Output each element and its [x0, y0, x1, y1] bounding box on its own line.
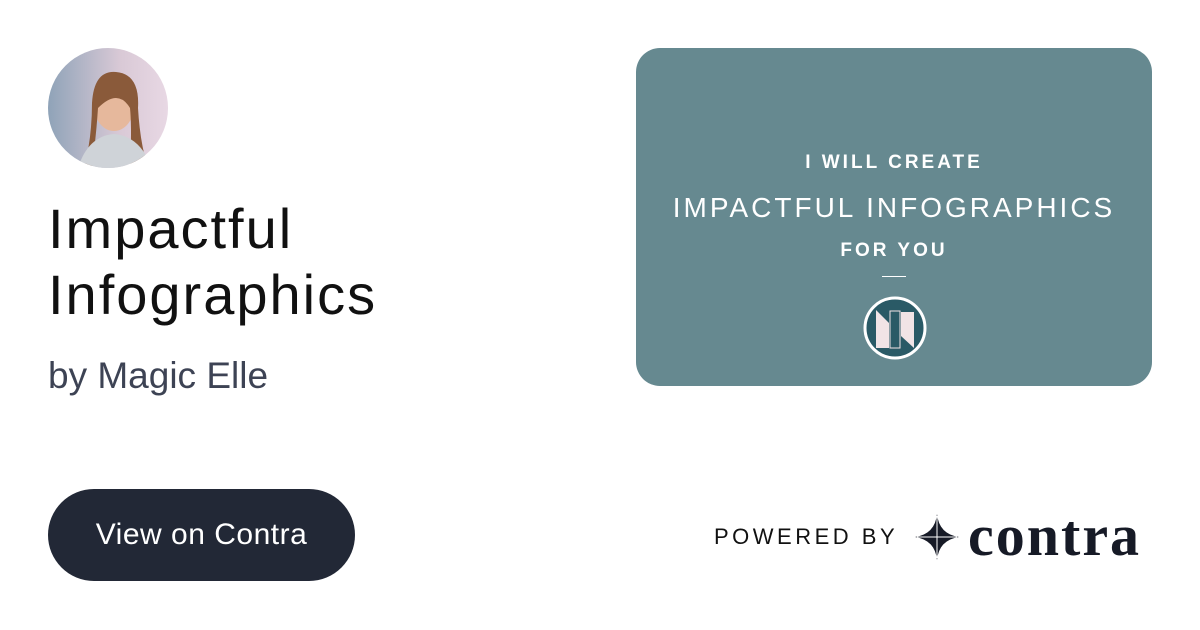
avatar: [48, 48, 168, 168]
title: Infographics: [48, 263, 377, 326]
button: View on Contra: [96, 518, 307, 551]
title: Impactful: [48, 197, 293, 260]
author: by Magic Elle: [48, 355, 268, 396]
card: FOR YOU: [840, 240, 948, 261]
icon: logo: [864, 296, 926, 360]
powered by: POWERED BY: [714, 524, 898, 549]
card: IMPACTFUL INFOGRAPHICS: [673, 192, 1115, 223]
card text: I WILL CREATE: [805, 152, 983, 173]
button: [48, 489, 355, 581]
contra wordmark: contra: [968, 503, 1141, 568]
card: [636, 48, 1152, 386]
icon: contra star: [915, 514, 959, 560]
title: [48, 197, 377, 326]
